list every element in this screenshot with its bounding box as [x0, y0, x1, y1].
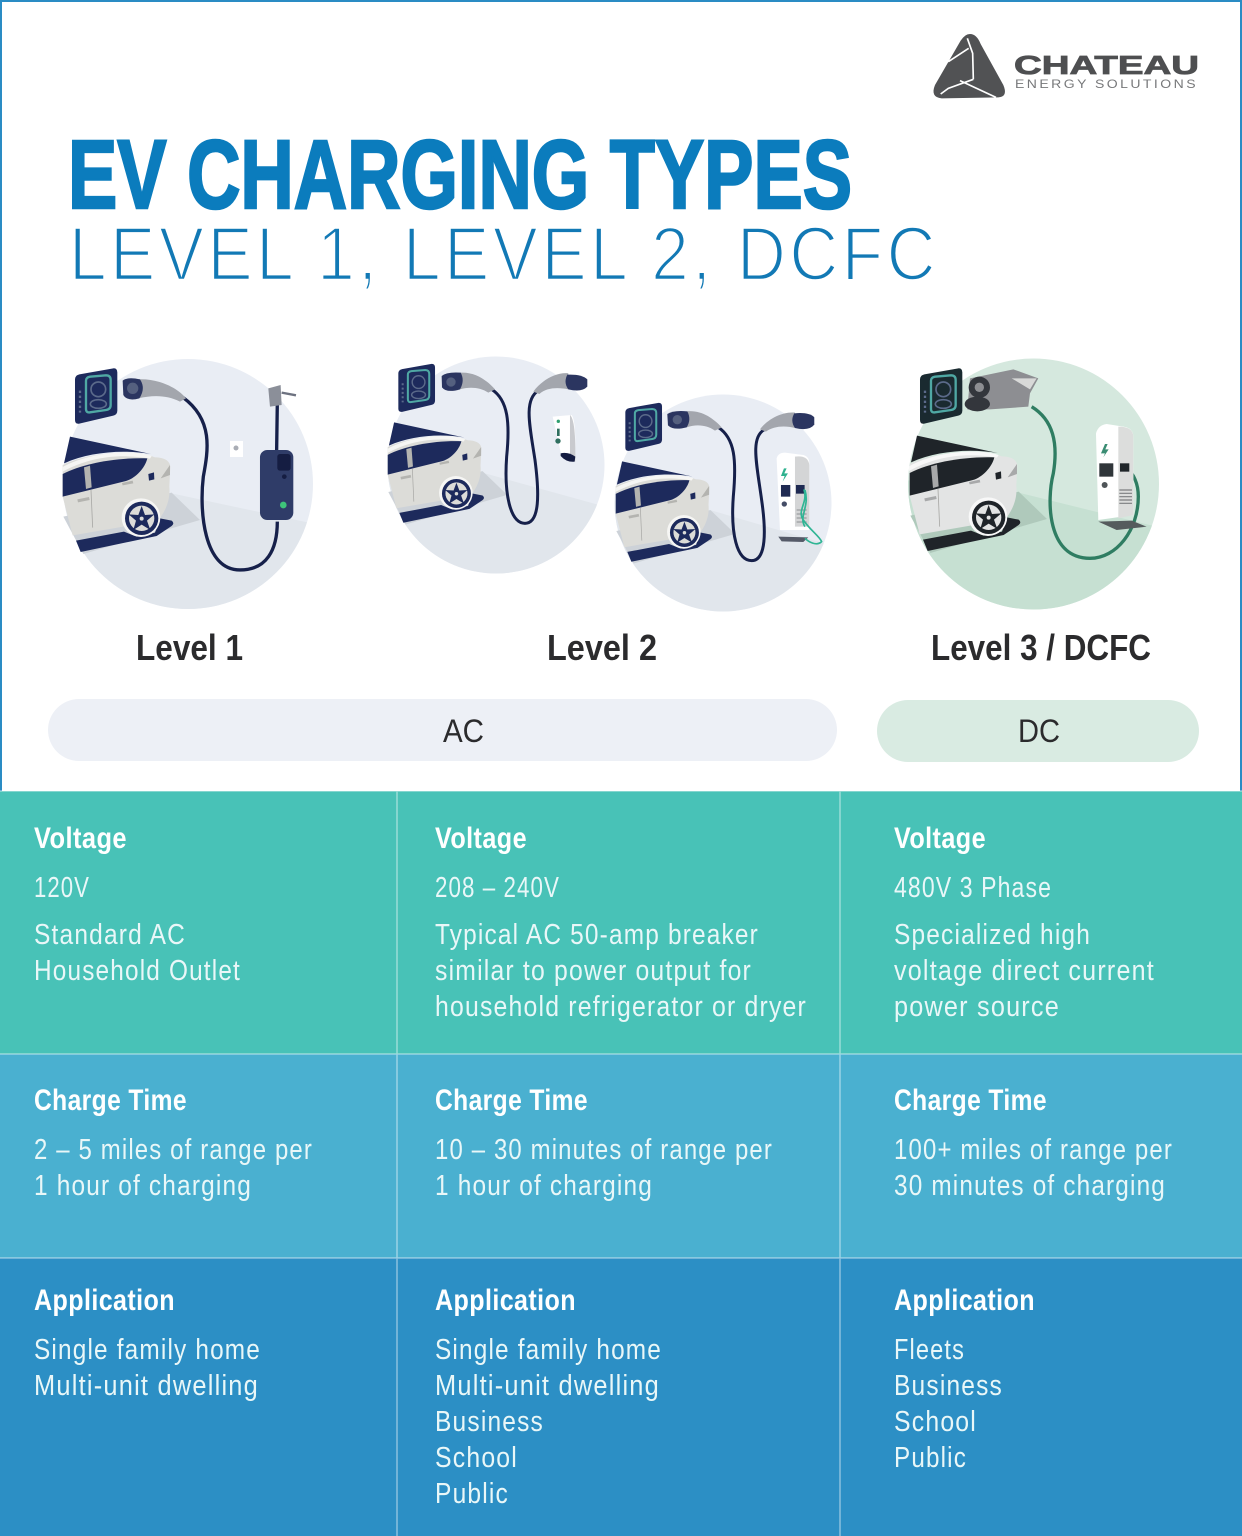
label: Level 3 / DCFC: Level 3 / DCFC — [931, 627, 1151, 668]
DC voltage: Specialized high — [894, 919, 1091, 951]
Level 1 voltage: Household Outlet — [34, 955, 241, 987]
logo tagline: ENERGY SOLUTIONS — [1015, 79, 1198, 91]
illustration: Level 2 wall charger — [380, 356, 610, 580]
DC voltage — [894, 822, 1155, 1023]
title: EV CHARGING TYPES — [68, 120, 852, 229]
voltage row — [0, 791, 1242, 1054]
Level 1 charge time: Charge Time — [34, 1084, 187, 1117]
DC charge time — [894, 1084, 1173, 1202]
Level 2 voltage — [435, 822, 807, 1023]
Level 2 application: Public — [435, 1478, 509, 1510]
Level 2 application: Application — [435, 1284, 576, 1317]
Level 2 application: Multi-unit dwelling — [435, 1370, 660, 1402]
icon: triangular logo mark — [933, 34, 1005, 98]
Level 2 application: Business — [435, 1406, 544, 1438]
application row — [0, 1258, 1242, 1536]
DC application — [894, 1284, 1035, 1474]
Level 1 voltage: Voltage — [34, 822, 127, 855]
illustration: Level 3 DC fast charger — [905, 358, 1170, 620]
cable and DC charging station — [965, 369, 1147, 558]
DC charge time: 30 minutes of charging — [894, 1170, 1166, 1202]
label: Level 2: Level 2 — [547, 627, 657, 668]
DC application: Application — [894, 1284, 1035, 1317]
Level 2 charge time — [435, 1084, 773, 1202]
Level 1 application — [34, 1284, 261, 1402]
DC application: Business — [894, 1370, 1003, 1402]
DC charge time: 100+ miles of range per — [894, 1134, 1173, 1166]
DC application: School — [894, 1406, 977, 1438]
car — [387, 422, 507, 524]
AC pill — [48, 699, 837, 761]
Level 1 charge time — [34, 1084, 313, 1202]
cable and charger box — [123, 378, 296, 570]
Level 1 application: Single family home — [34, 1334, 261, 1366]
illustration: Level 1 portable charger — [60, 359, 320, 620]
wall connector port — [920, 368, 962, 424]
car — [62, 437, 200, 554]
Level 1 charge time: 1 hour of charging — [34, 1170, 252, 1202]
DC voltage: Voltage — [894, 822, 986, 855]
wall connector port — [398, 364, 435, 412]
Level 1 charge time: 2 – 5 miles of range per — [34, 1134, 313, 1166]
wall connector port — [625, 403, 662, 451]
Level 2 voltage: Voltage — [435, 822, 527, 855]
AC pill: AC — [443, 713, 484, 749]
DC charge time: Charge Time — [894, 1084, 1047, 1117]
Level 1 application: Application — [34, 1284, 175, 1317]
logo: Chateau Energy Solutions — [933, 34, 1199, 98]
DC pill — [877, 700, 1199, 762]
Level 2 voltage: household refrigerator or dryer — [435, 991, 807, 1023]
Level 2 charge time: 10 – 30 minutes of range per — [435, 1134, 773, 1166]
subtitle: LEVEL 1, LEVEL 2, DCFC — [69, 212, 939, 297]
charge time row — [0, 1054, 1242, 1258]
Level 2 voltage: Typical AC 50-amp breaker — [435, 919, 759, 951]
Level 1 voltage: 120V — [34, 872, 90, 904]
Level 2 charge time: 1 hour of charging — [435, 1170, 653, 1202]
wall outlet — [230, 441, 243, 457]
DC application: Fleets — [894, 1334, 965, 1366]
wall connector port — [75, 368, 117, 424]
Level 2 charge time: Charge Time — [435, 1084, 588, 1117]
DC application: Public — [894, 1442, 967, 1474]
car — [615, 461, 735, 563]
DC pill: DC — [1018, 713, 1060, 749]
DC voltage: 480V 3 Phase — [894, 872, 1052, 904]
Level 1 application: Multi-unit dwelling — [34, 1370, 259, 1402]
car — [909, 436, 1047, 553]
Level 2 voltage: 208 – 240V — [435, 872, 560, 904]
DC voltage: power source — [894, 991, 1060, 1023]
illustration: Level 2 pedestal charger — [610, 394, 840, 615]
Level 2 application: Single family home — [435, 1334, 662, 1366]
Level 1 voltage: Standard AC — [34, 919, 186, 951]
logo wordmark: CHATEAU — [1014, 50, 1199, 80]
Level 1 voltage — [34, 822, 241, 987]
Level 2 application: School — [435, 1442, 518, 1474]
label: Level 1: Level 1 — [136, 627, 243, 668]
DC voltage: voltage direct current — [894, 955, 1155, 987]
Level 2 application — [435, 1284, 662, 1510]
Level 2 voltage: similar to power output for — [435, 955, 752, 987]
cable and pedestal charger — [667, 411, 822, 561]
cable and wall box — [442, 372, 587, 523]
